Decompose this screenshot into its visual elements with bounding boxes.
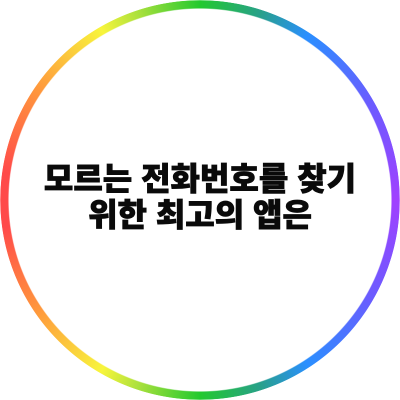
title: 모르는 전화번호를 찾기	[44, 160, 356, 196]
title: 위한 최고의 앱은	[88, 197, 312, 233]
title	[44, 160, 356, 233]
